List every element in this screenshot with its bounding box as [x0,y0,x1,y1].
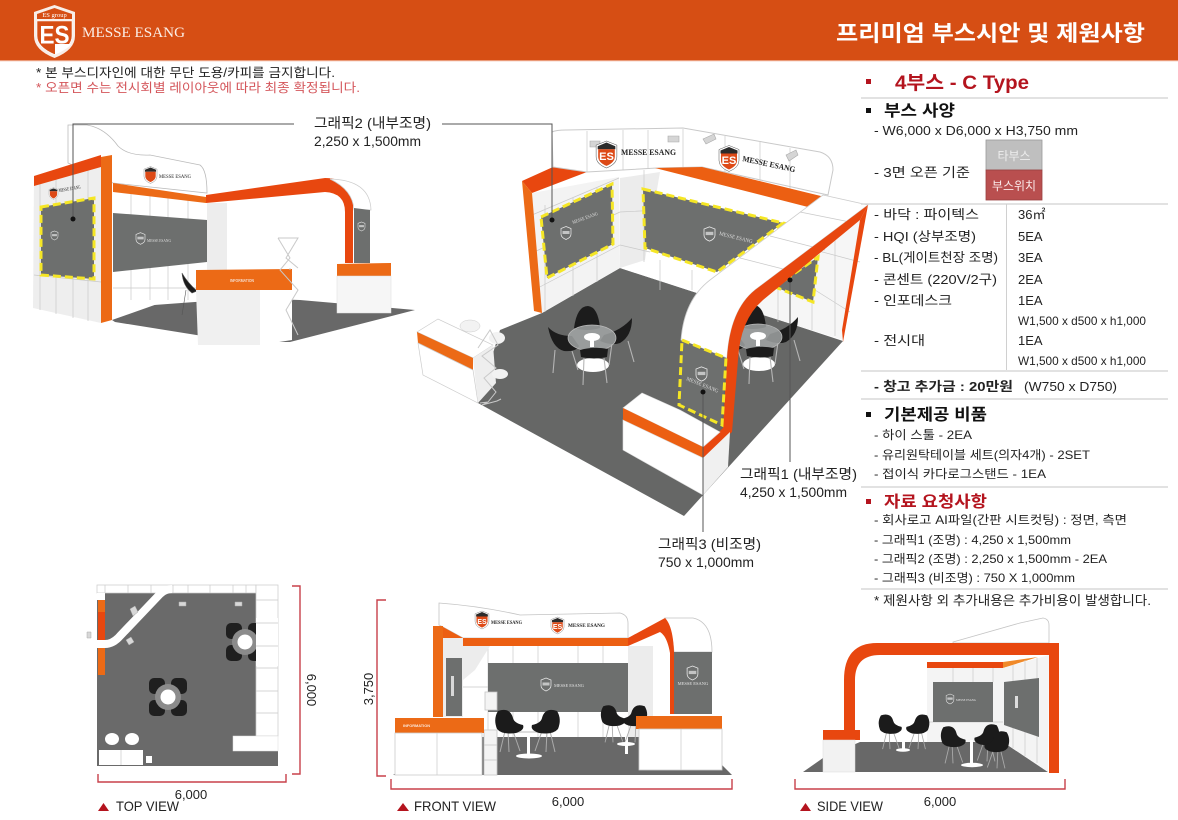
back wall orange band [113,183,206,203]
orange strip [97,593,105,675]
spec table: 3EA [1018,250,1043,265]
back graphic [488,663,628,712]
heading: booth spec [866,102,955,120]
booth position diagram [986,140,1042,200]
spec table: W1,500 x d500 x h1,000 [1018,314,1146,328]
left perspective view of booth [33,125,415,345]
spec table [874,207,1146,368]
left orange column [522,181,542,313]
data request list [874,513,1127,585]
front wall [33,155,101,323]
column below arch [703,432,730,495]
view label: FRONT VIEW [414,798,497,814]
back wall [113,184,222,308]
orange column [433,626,443,717]
callout: graphic 2 left: 그래픽2 (내부조명) [314,115,431,131]
width label: 6,000 [924,794,956,809]
front pedestal [623,393,720,495]
floor [112,296,415,342]
booth position diagram: 타부스 [997,149,1031,163]
red arch beam [206,178,353,263]
front wall logo: MESSE ESANG [59,186,81,194]
top wall modules [97,585,256,593]
graphic 1 with yellow frame [775,257,818,302]
stools [105,733,139,745]
spec table: 5EA [1018,229,1043,244]
spec table: 2EA [1018,272,1043,287]
view label: SIDE VIEW [817,798,884,814]
graphic 3 with yellow frame: MESSE ESANG [685,376,719,395]
width label: 6,000 [175,787,207,802]
stools and rack [460,320,508,405]
table set 2 [941,724,1009,768]
spec table: - 인포데스크 [874,293,952,308]
floor [803,742,1048,772]
sign logo 2: ES [722,155,736,167]
graphic 2 with yellow dashed frame [41,198,94,279]
front wall red top [34,155,101,186]
panel: specifications [861,73,1168,608]
table set in front [548,306,634,385]
graphic 2 left, yellow frame: MESSE ESANG [572,212,599,226]
red arch [703,205,868,458]
spec table: 1EA [1018,293,1043,308]
right pedestal [337,263,391,313]
top fascia sign [552,128,833,195]
logo: ES group shield: ES [40,22,70,50]
back wall graphic: MESSE ESANG [147,238,172,243]
view label: TOP VIEW [116,798,180,814]
floor [478,268,843,516]
top view [87,585,319,814]
basic items list: - 하이 스툴 - 2EA [874,428,972,442]
graphic 2 left, yellow frame [541,184,613,278]
spec table: - HQI (상부조명) [874,229,976,244]
spec table: 36㎡ [1018,207,1045,222]
top fascia sign [68,125,207,193]
curved beam [97,589,172,644]
back wall [620,168,830,293]
spec size: - W6,000 x D6,000 x H3,750 mm [874,123,1078,138]
page title: 프리미엄 부스시안 및 제원사항 [836,21,1145,46]
floor plan [97,585,278,766]
storage surcharge: (W750 x D750) [1024,379,1117,394]
left desk: INFORMATION [403,724,430,728]
callout: graphic 3 [658,390,761,570]
basic items list: - 접이식 카다로그스탠드 - 1EA [874,467,1046,481]
front wall logo [49,186,81,199]
width bracket [391,779,732,789]
side graphic [354,208,370,263]
back wall graphic [113,213,207,272]
right wall modules [256,585,278,736]
heading: basic items: 기본제공 비품 [884,406,987,424]
top sign [953,618,1049,643]
right desk [636,716,722,770]
spot lights [590,134,798,161]
graphic 2 right, yellow frame: MESSE ESANG [719,231,753,245]
sign logo 2 [719,146,796,174]
callout: graphic 3: 그래픽3 (비조명) [658,536,761,552]
side wall [1003,655,1049,772]
chairs and table 1 [495,710,560,758]
basic items list [874,428,1091,481]
desk [823,723,860,772]
right graphic [674,652,712,714]
main perspective view of booth [417,128,868,516]
spec table: 1EA [1018,333,1043,348]
back graphic: MESSE ESANG [554,683,585,688]
roof beam white top [681,195,868,358]
sign logo 2: MESSE ESANG [742,154,796,174]
right wall [753,220,860,340]
band on back wall [927,662,1003,668]
callout: graphic 1 [740,278,857,500]
right red column [842,205,868,342]
footnote: * 제원사항 외 추가내용은 추가비용이 발생합니다. [874,593,1151,608]
sign logo [144,167,191,183]
orange arch and column [844,643,1059,773]
depth label: 6,000 [304,674,319,706]
table set behind arch [714,305,800,384]
left wall red top [522,167,587,193]
callout: graphic 2 left [70,115,554,222]
callout: graphic 3: 750 x 1,000mm [658,554,754,570]
floor [393,737,732,775]
graphic 2 right, yellow frame [643,189,783,272]
height bracket [377,600,386,776]
info desk: INFORMATION [230,278,254,283]
storage surcharge: - 창고 추가금 : 20만원 [874,379,1013,394]
lights [87,602,242,645]
data request list: - 그래픽3 (비조명) : 750 X 1,000mm [874,571,1075,585]
booth position diagram: 부스위치 [992,179,1036,193]
left desk [395,718,484,775]
sign logo 1: ES [477,619,487,626]
sign logo 2 [551,617,606,634]
spec table: - 전시대 [874,333,925,348]
width label: 6,000 [552,794,584,809]
info desk [99,750,152,765]
back wall [463,646,628,737]
graphic 3 with yellow frame [679,340,726,425]
open sides: - 3면 오픈 기준 [874,165,970,180]
back wall [927,662,1003,742]
data request list: - 회사로고 AI파일(간판 시트컷팅) : 정면, 측면 [874,513,1127,527]
dimension brackets [98,586,300,782]
info desk [182,269,292,345]
notices [36,66,360,95]
width bracket [795,779,1065,789]
catalogue rack [278,238,298,335]
info desk [417,319,496,403]
data request list: - 그래픽2 (조명) : 2,250 x 1,500mm - 2EA [874,552,1107,566]
red arch [628,618,674,714]
orange column [101,155,112,323]
left wall [532,177,620,313]
right white arch [665,618,712,652]
spec table: - 바닥 : 파이텍스 [874,207,979,222]
brand name: MESSE ESANG [82,25,185,41]
callout: graphic 1: 4,250 x 1,500mm [740,484,847,500]
top sign [439,603,628,638]
logo: ES group shield [34,5,75,58]
spec table: W1,500 x d500 x h1,000 [1018,354,1146,368]
sign logo 1: MESSE ESANG [491,620,523,626]
back orange band [655,167,825,207]
left side wall and graphic [443,638,490,717]
table set centre [149,678,187,716]
sign logo 2: ES [553,624,562,631]
sign logo 2: MESSE ESANG [568,623,606,629]
logo: ES group shield: ES group [42,12,67,19]
front view [361,600,732,814]
back graphic [933,682,993,722]
header bar [0,0,1178,61]
basic items list: - 유리원탁테이블 세트(의자4개) - 2SET [874,448,1091,462]
sign logo 1 [596,141,676,168]
callout: graphic 1: 그래픽1 (내부조명) [740,466,857,482]
sign logo 1: MESSE ESANG [621,148,676,157]
orange band [443,627,628,646]
back graphic: MESSE ESANG [956,698,976,702]
notices: * 오픈면 수는 전시회별 레이아웃에 따라 최종 확정됩니다. [36,81,360,95]
rack [484,692,497,775]
side graphic [1004,678,1039,737]
right graphic: MESSE ESANG [678,681,709,686]
sign logo 1 [475,611,523,629]
data request list: - 그래픽1 (조명) : 4,250 x 1,500mm [874,533,1071,547]
heading: booth type: 4부스 - C Type [895,73,1029,94]
table set clipped [226,618,278,666]
spec table: - BL(게이트천장 조명) [874,250,998,265]
spec table: - 콘센트 (220V/2구) [874,272,997,287]
heading: data request: 자료 요청사항 [884,493,987,511]
chairs and table 2 [601,705,647,754]
heading: booth spec: 부스 사양 [884,102,955,120]
sign logo: MESSE ESANG [159,174,191,180]
callout: graphic 2 left: 2,250 x 1,500mm [314,133,421,149]
table set 1 [879,714,929,752]
right side wall [628,640,673,737]
height label: 3,750 [361,673,376,705]
side view [795,618,1065,814]
storage surcharge [874,379,1117,394]
lower right pedestal [233,736,278,751]
sign logo 1: ES [599,151,614,163]
notices: * 본 부스디자인에 대한 무단 도용/카피를 금지합니다. [36,66,335,80]
